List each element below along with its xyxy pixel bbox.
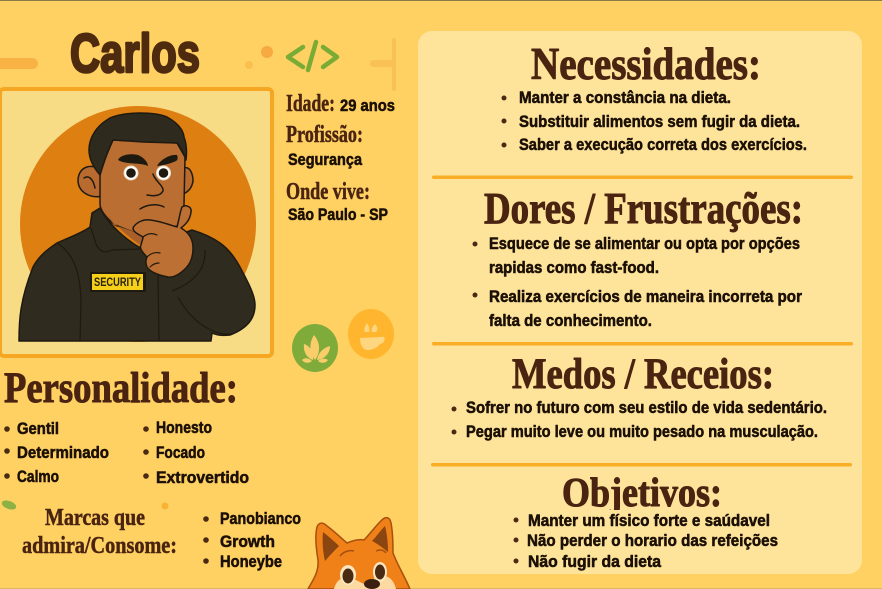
jacket seams xyxy=(57,228,232,341)
profile facts: São Paulo - SP xyxy=(288,206,388,224)
panel: right column xyxy=(418,31,862,574)
heading: marcas: admira/Consome: xyxy=(22,533,177,559)
brands list xyxy=(203,510,301,571)
section: objetivos: Manter um físico forte e saúdavel xyxy=(528,512,770,530)
eyes xyxy=(124,166,170,180)
brands list: Panobianco xyxy=(220,510,301,528)
section: medos xyxy=(452,351,827,441)
icon: orange cup badge xyxy=(348,309,394,359)
decoration: dots xyxy=(245,46,273,69)
section: objetivos: Não perder o horario das refeições xyxy=(527,532,778,550)
section: dores: rapidas como fast-food. xyxy=(489,259,659,277)
mascot: fox xyxy=(308,518,410,589)
profile facts: Idade: xyxy=(286,91,335,117)
nose and mouth xyxy=(84,174,164,209)
personality list right: Extrovertido xyxy=(156,469,249,487)
section: dores: Realiza exercícios de maneira incorreta por xyxy=(489,288,803,306)
icon: green leaf badge xyxy=(292,324,338,372)
character illustration xyxy=(19,113,255,341)
section: dores: falta de conhecimento. xyxy=(489,312,652,330)
personality list left: Determinado xyxy=(17,444,109,462)
profile facts: Onde vive: xyxy=(286,179,370,205)
decoration: top left bar xyxy=(0,58,38,69)
decoration: small leaf and dot xyxy=(1,499,168,511)
section: objetivos: Não fugir da dieta xyxy=(528,553,662,571)
portrait card xyxy=(0,89,272,356)
decoration: top right bracket xyxy=(370,38,396,91)
personality list left: Calmo xyxy=(17,468,59,486)
section: objetivos xyxy=(514,469,778,571)
section: necessidades: Necessidades: xyxy=(531,39,761,89)
security badge: SECURITY xyxy=(94,277,141,289)
profile facts: Segurança xyxy=(288,151,363,169)
section: necessidades: Manter a constância na dieta. xyxy=(519,89,731,107)
section: medos: Sofrer no futuro com seu estilo de vida sedentário. xyxy=(466,399,827,417)
orange circle background xyxy=(20,106,256,342)
left ear xyxy=(78,166,103,197)
heading: marcas: Marcas que xyxy=(45,505,145,531)
brands list: Honeybe xyxy=(220,553,282,571)
jacket xyxy=(19,208,255,341)
section: medos: Pegar muito leve ou muito pesado na musculação. xyxy=(466,423,818,441)
section: medos: Medos / Receios: xyxy=(512,351,774,398)
icon: code symbol xyxy=(288,42,337,70)
section: necessidades xyxy=(502,39,807,154)
right ear xyxy=(183,168,193,194)
profile facts xyxy=(286,91,395,224)
finger lines xyxy=(143,234,160,267)
hair xyxy=(89,113,187,175)
eyebrows xyxy=(118,154,178,166)
section: dores: Esquece de se alimentar ou opta por opções xyxy=(489,235,800,253)
profile facts: Profissão: xyxy=(286,122,363,148)
hand xyxy=(133,206,193,277)
personality list left: Gentil xyxy=(17,420,59,438)
personality list right xyxy=(143,419,249,487)
section: necessidades: Substituir alimentos sem fugir da dieta. xyxy=(519,113,800,131)
heading: personalidade: Personalidade: xyxy=(4,365,238,412)
face xyxy=(100,140,185,232)
personality list left xyxy=(4,420,109,486)
security badge xyxy=(90,272,146,292)
heading: marcas xyxy=(22,505,177,559)
brands list: Growth xyxy=(220,533,275,551)
title: Carlos xyxy=(70,22,200,84)
section: objetivos: Objetivos: xyxy=(562,469,722,515)
personality list right: Focado xyxy=(156,444,205,462)
section: necessidades: Saber a execução correta dos exercícios. xyxy=(519,136,807,154)
section: dores xyxy=(472,184,803,330)
personality list right: Honesto xyxy=(156,419,212,437)
section: dores: Dores / Frustrações: xyxy=(484,184,803,233)
neck skin xyxy=(102,208,150,246)
profile facts: 29 anos xyxy=(340,97,395,115)
